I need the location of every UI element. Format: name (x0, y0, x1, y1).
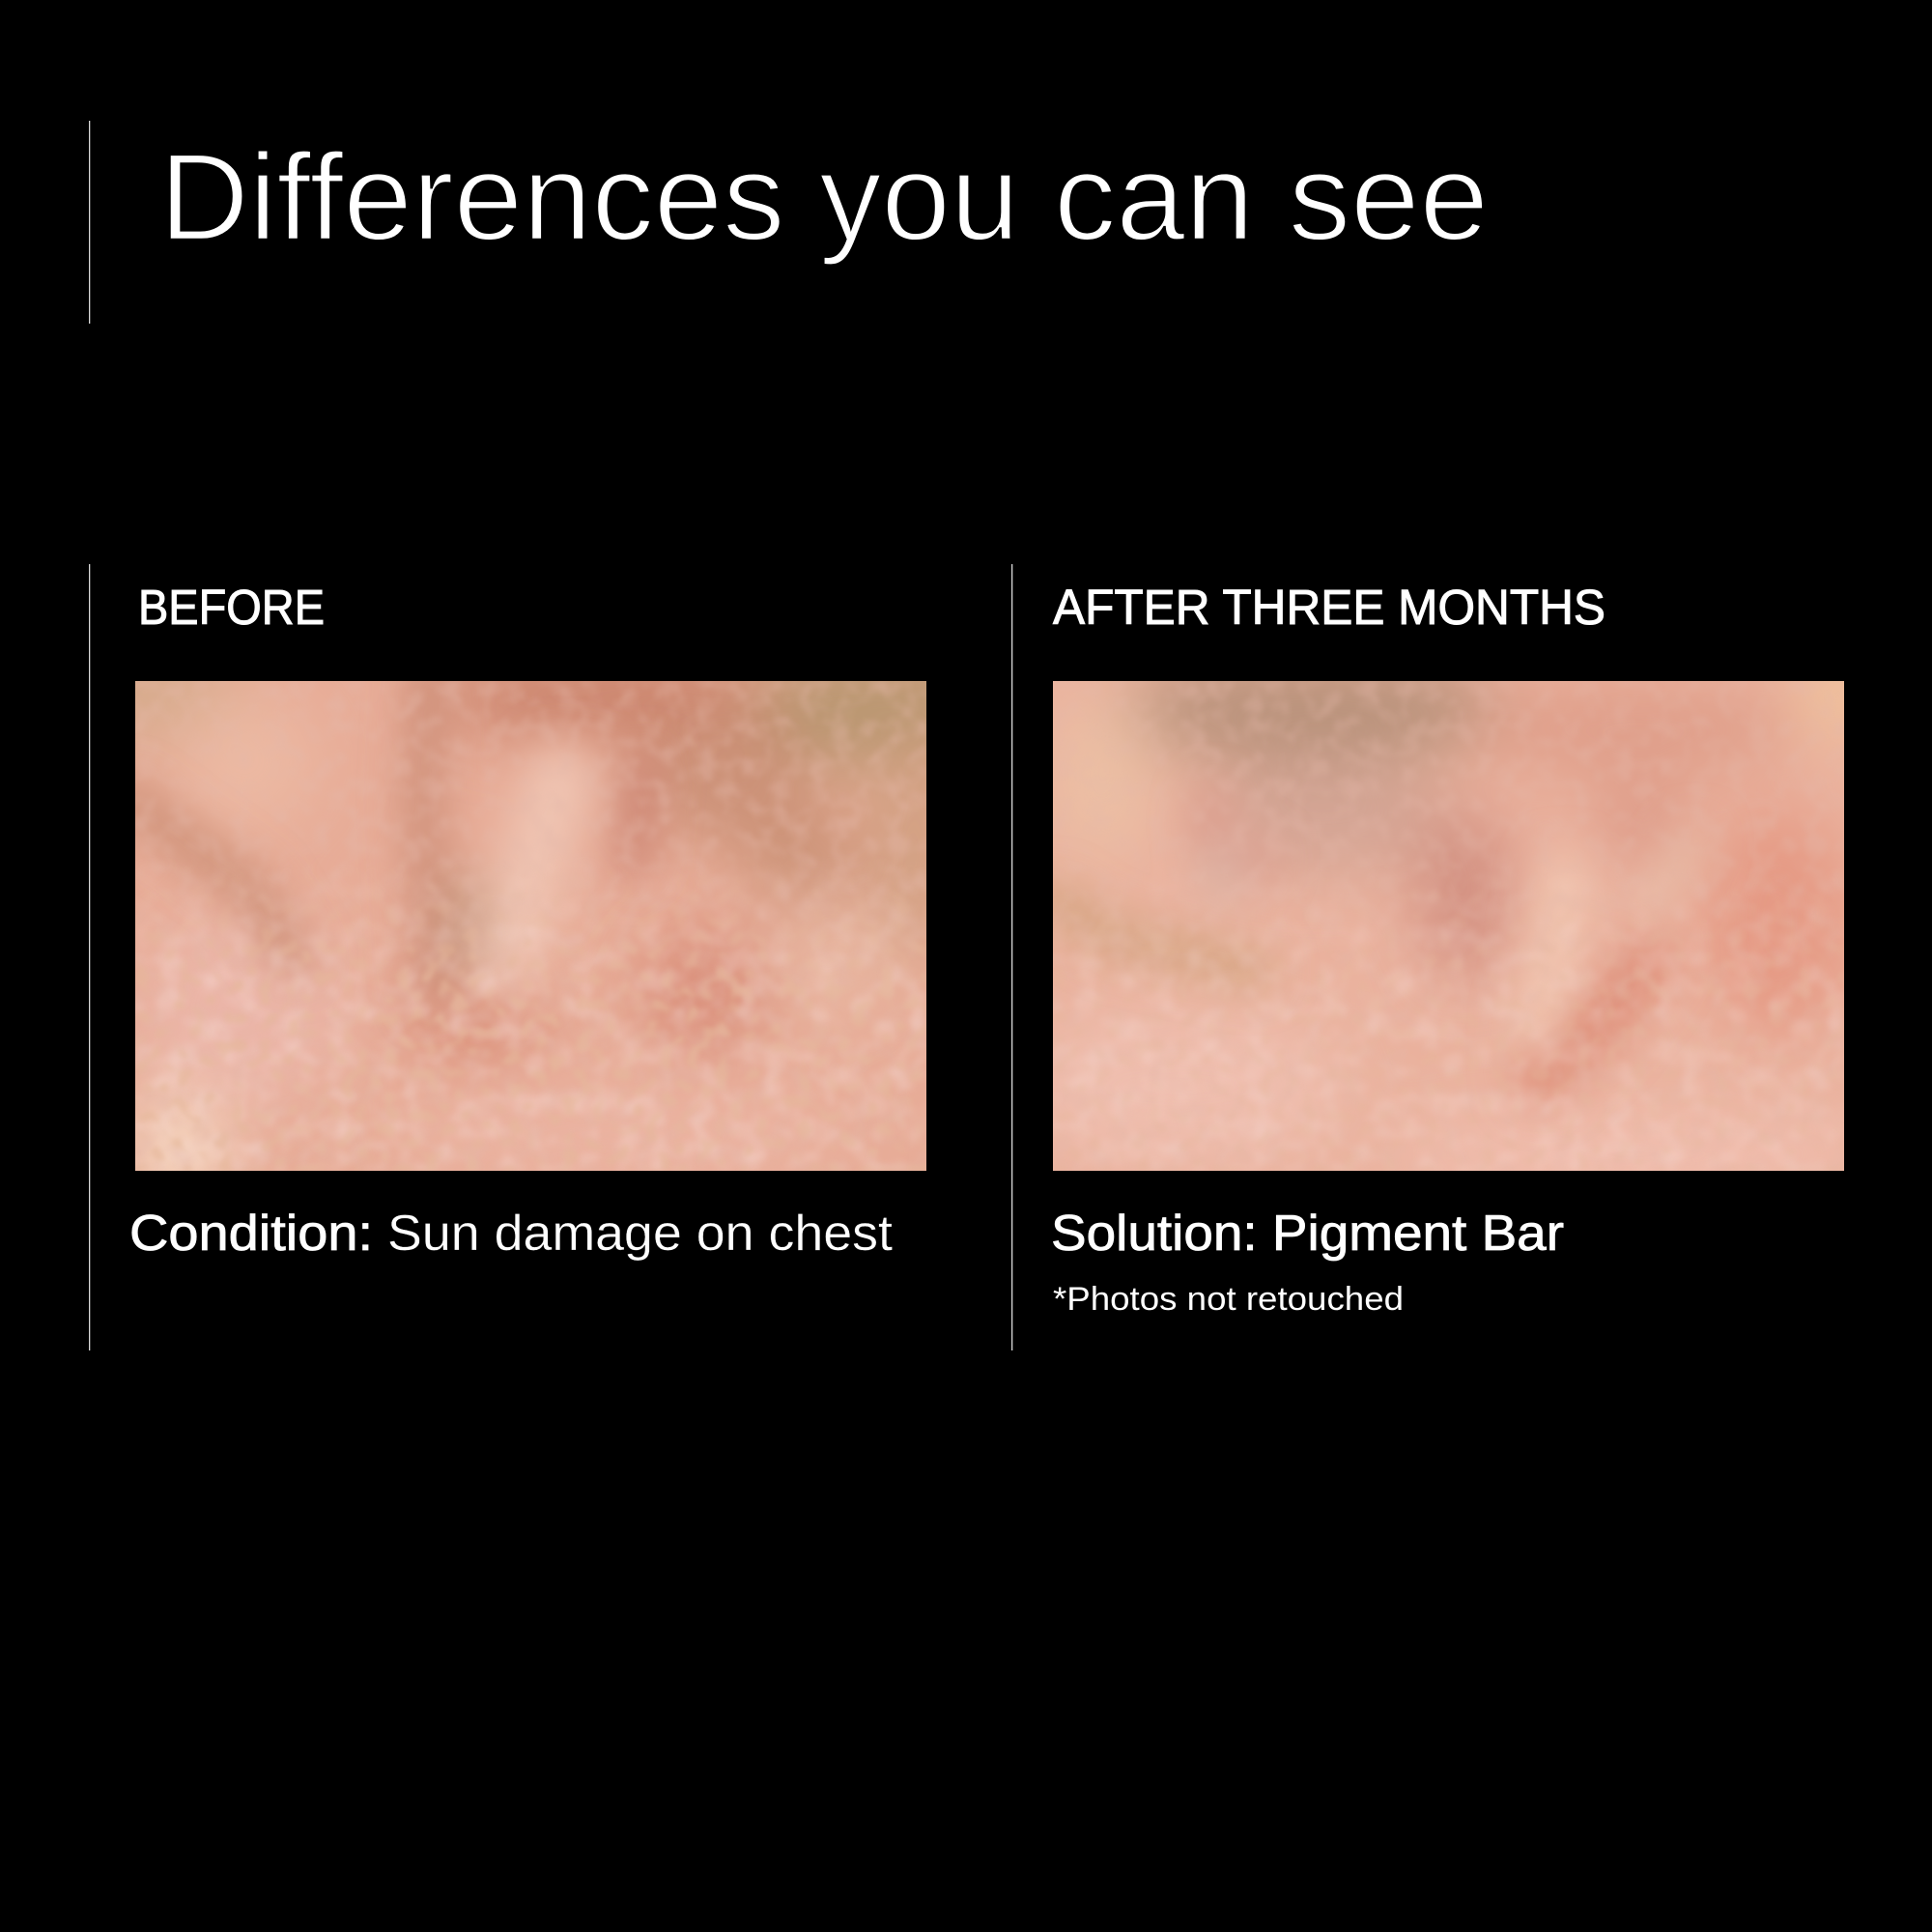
footnote: *Photos not retouched (1053, 1281, 1404, 1318)
photo: after skin (1053, 681, 1844, 1171)
before caption: Condition: (129, 1206, 373, 1262)
title: Differences you can see (159, 128, 1489, 267)
before heading: BEFORE (138, 580, 325, 635)
after heading: AFTER THREE MONTHS (1053, 580, 1605, 635)
before caption: Sun damage on chest (387, 1206, 894, 1262)
photo: before skin (135, 681, 926, 1171)
title rule (89, 121, 90, 324)
after caption: Solution: Pigment Bar (1051, 1206, 1564, 1262)
panel: after (1011, 564, 1884, 1350)
after column rule (1011, 564, 1012, 1350)
panel: before (89, 564, 926, 1350)
before column rule (89, 564, 90, 1350)
